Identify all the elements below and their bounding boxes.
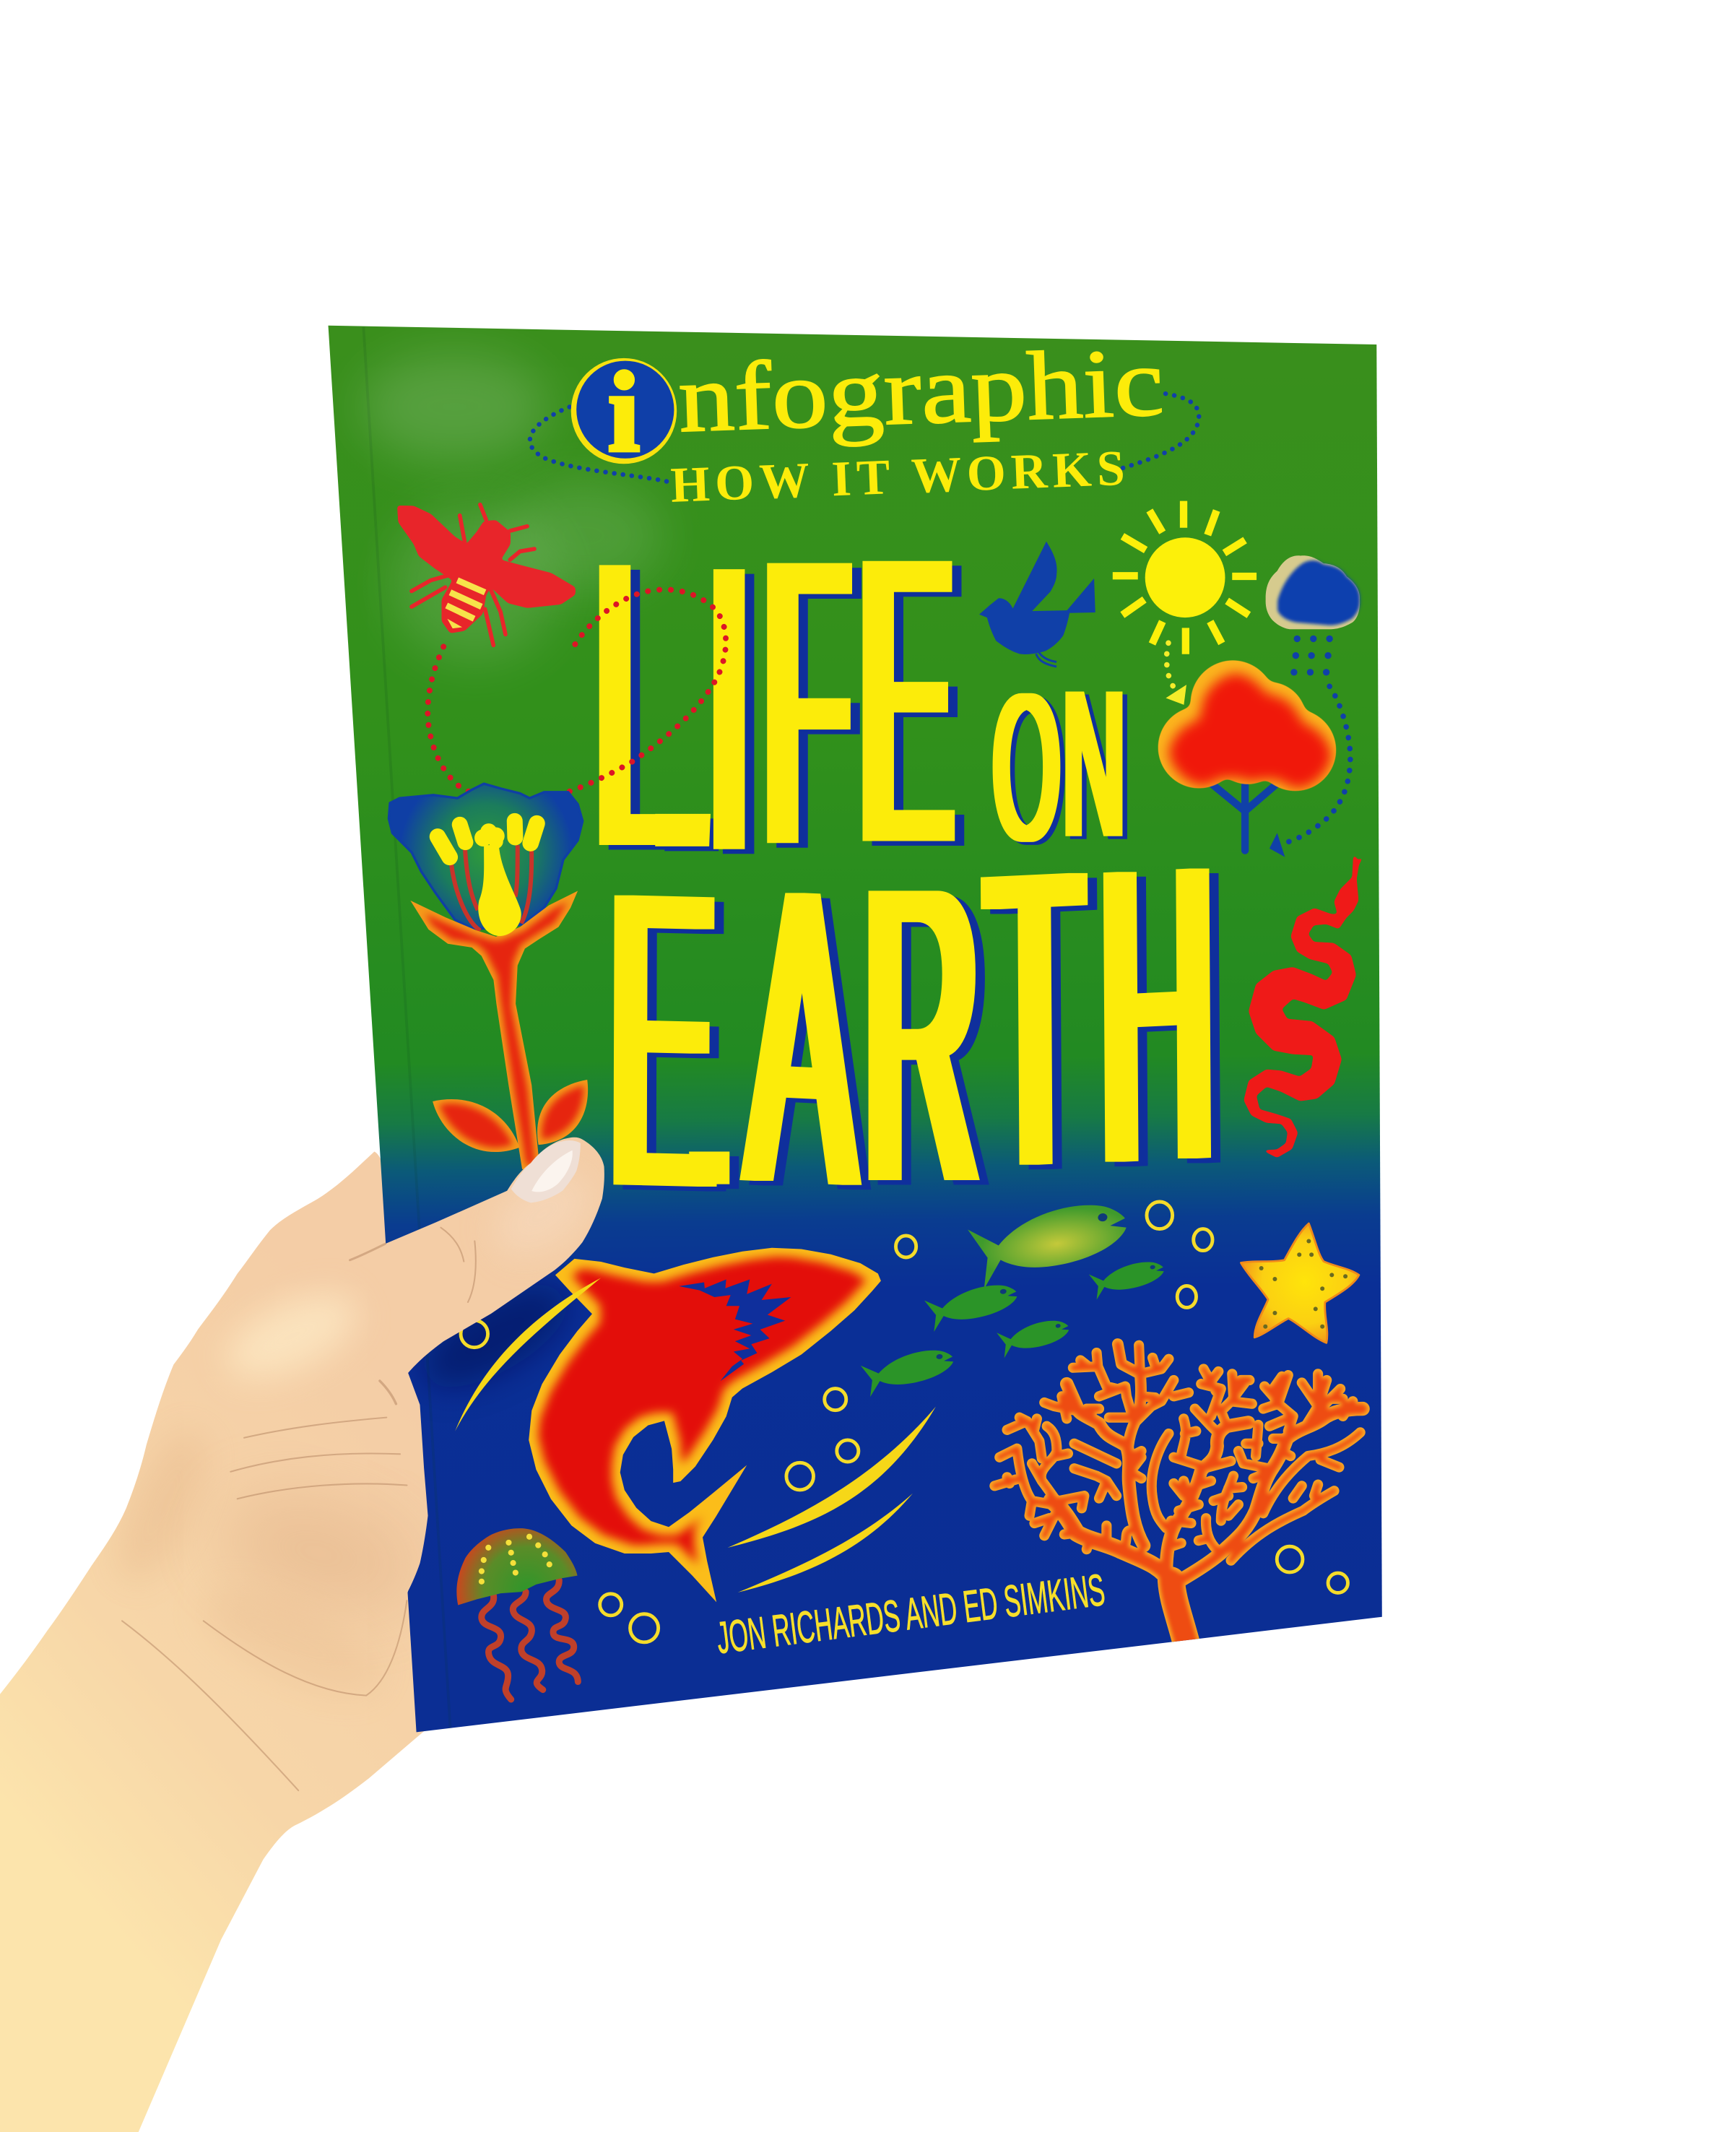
flower leaves: [433, 1080, 588, 1152]
logo: infographic: [530, 329, 1199, 514]
cloud rim: [1266, 555, 1360, 629]
E foot extension: [698, 1152, 720, 1184]
bee legs: [412, 505, 534, 645]
hand creases: [122, 1228, 476, 1790]
arrow: rain to tree: [1270, 686, 1350, 857]
coral trunk: [1171, 1580, 1188, 1650]
title words LIFE and EARTH: [597, 473, 1215, 1277]
fish 3: [924, 1282, 1020, 1332]
cover background: [329, 326, 1382, 1732]
title: Life on Earth: [597, 473, 1215, 1277]
jellyfish tentacles: [482, 1580, 578, 1699]
title word: EARTH: EARTH: [609, 777, 1215, 1277]
swoosh lines: [455, 1278, 936, 1592]
hand shading and highlights: [125, 1180, 596, 1667]
flower head: [389, 784, 583, 930]
icon: jellyfish: [456, 1528, 578, 1699]
coral limbs: [1052, 1501, 1171, 1583]
shadow under thumb: [407, 1265, 583, 1408]
thumb and palm: [244, 1138, 604, 1682]
icon: snake: [1245, 856, 1363, 1157]
title word: ON: ON: [993, 647, 1125, 885]
jellyfish dots: [479, 1534, 552, 1585]
i badge: [571, 350, 677, 476]
book cover: [329, 326, 1382, 1732]
bubbles: [461, 1202, 1347, 1642]
bee body and wings: [397, 506, 576, 633]
icon: starfish: [1241, 1223, 1359, 1343]
cover glare: [360, 352, 664, 662]
shoal of fish: [860, 1200, 1166, 1398]
icon: tree: [1158, 661, 1336, 851]
arrow: sun to tree: [1166, 643, 1186, 705]
red dotted pollination path: [428, 589, 726, 801]
flower stem and sepals: [410, 891, 578, 1169]
icon: sun: [1113, 501, 1257, 654]
hand behind the book: [0, 1152, 434, 2132]
fish 4: [996, 1318, 1072, 1358]
icon: flower: [389, 784, 588, 1169]
icon: bird: [979, 542, 1095, 667]
authors: JON RICHARDS AND ED SIMKINS: [714, 1565, 1108, 1663]
icon: shark: [529, 1248, 881, 1602]
large fish: [967, 1200, 1132, 1290]
title word: LIFE: LIFE: [597, 473, 951, 935]
icon: coral: [994, 1344, 1363, 1650]
fish 5: [860, 1347, 957, 1398]
cloud body: [1277, 560, 1360, 625]
thumb nail: [511, 1140, 581, 1202]
wordmark: nfographic: [677, 329, 1166, 453]
flower stamens and pistil: [438, 821, 537, 936]
i badge: i: [608, 350, 640, 476]
spine fold: [363, 327, 451, 1728]
icon: bee: [397, 505, 576, 645]
jellyfish dome: [456, 1528, 578, 1605]
fish 2: [1088, 1260, 1166, 1300]
bee stripes: [446, 580, 485, 628]
hand over the book: [101, 1138, 606, 1790]
subtitle: HOW IT WORKS: [669, 441, 1126, 514]
shark teeth: [679, 1279, 791, 1381]
icon: cloud with rain: [1266, 555, 1360, 675]
L foot extension: [664, 814, 701, 846]
coral twigs: [994, 1346, 1360, 1561]
dotted orbit: [530, 394, 1199, 482]
flower filaments: [451, 845, 531, 930]
rain dots: [1290, 636, 1333, 675]
